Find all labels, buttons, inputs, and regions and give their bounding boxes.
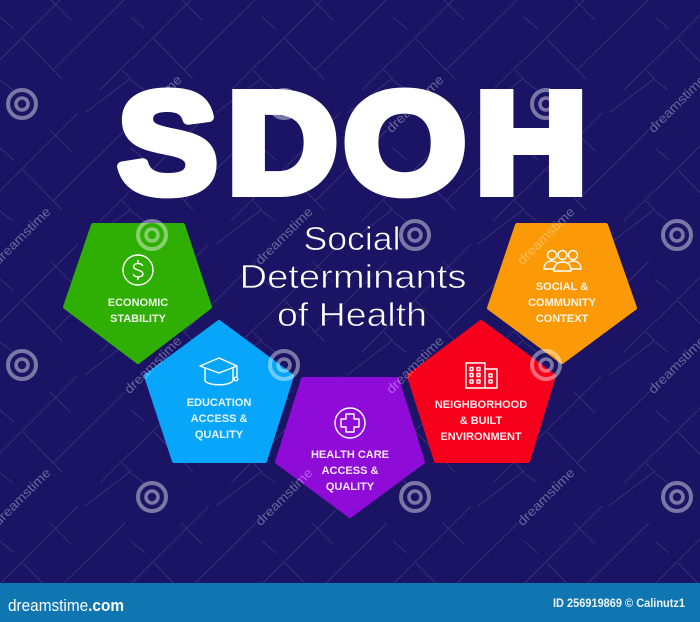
label: education access and quality: ACCESS & xyxy=(191,413,247,425)
icon: buildings xyxy=(466,363,497,388)
watermark text xyxy=(0,72,700,529)
panel: economic stability xyxy=(65,225,210,362)
panel: health care access and quality xyxy=(277,379,423,516)
label: social and community context: CONTEXT xyxy=(536,313,589,325)
watermark text: dreamstime xyxy=(514,465,578,529)
label: economic stability: ECONOMIC xyxy=(108,297,168,309)
watermark text: dreamstime xyxy=(383,333,447,397)
label: education access and quality: QUALITY xyxy=(195,429,244,441)
panel: education access and quality xyxy=(146,322,292,461)
subtitle: Social xyxy=(304,220,400,257)
title: O xyxy=(344,63,466,222)
title: H xyxy=(475,63,587,223)
subtitle xyxy=(240,220,466,333)
title: D xyxy=(227,64,338,223)
icon: people group xyxy=(544,250,581,271)
label: education access and quality: EDUCATION xyxy=(187,397,251,409)
title: S xyxy=(118,63,217,222)
title xyxy=(118,63,587,223)
icon: graduation cap xyxy=(200,358,238,385)
subtitle: Determinants xyxy=(240,258,466,295)
watermark text: dreamstime xyxy=(252,465,316,529)
label: health care access and quality: HEALTH CARE xyxy=(311,449,389,461)
footer bar xyxy=(0,583,700,622)
label: neighborhood and built environment: NEIGHBORHOOD xyxy=(435,399,527,411)
footer image id and credit: ID 256919869 © Calinutz1 xyxy=(553,596,685,610)
icon: medical cross xyxy=(335,408,365,438)
label: health care access and quality: QUALITY xyxy=(326,481,375,493)
label: neighborhood and built environment: ENVIRONMENT xyxy=(440,431,522,443)
label: economic stability: STABILITY xyxy=(110,313,167,325)
panel: neighborhood and built environment xyxy=(409,322,554,461)
watermark spirals xyxy=(8,90,691,511)
icon: dollar coin xyxy=(123,255,153,285)
watermark text: dreamstime xyxy=(383,72,447,136)
watermark text: dreamstime xyxy=(252,204,316,268)
footer logo text: dreamstime.com xyxy=(8,596,124,615)
panel: social and community context xyxy=(489,225,635,362)
label: neighborhood and built environment: & BUILT xyxy=(460,415,503,427)
subtitle: of Health xyxy=(277,296,427,333)
label: social and community context: COMMUNITY xyxy=(528,297,597,309)
label: social and community context: SOCIAL & xyxy=(536,281,588,293)
label: health care access and quality: ACCESS & xyxy=(322,465,378,477)
watermark text: dreamstime xyxy=(121,333,185,397)
watermark text: dreamstime xyxy=(121,72,185,136)
watermark text: dreamstime xyxy=(514,204,578,268)
